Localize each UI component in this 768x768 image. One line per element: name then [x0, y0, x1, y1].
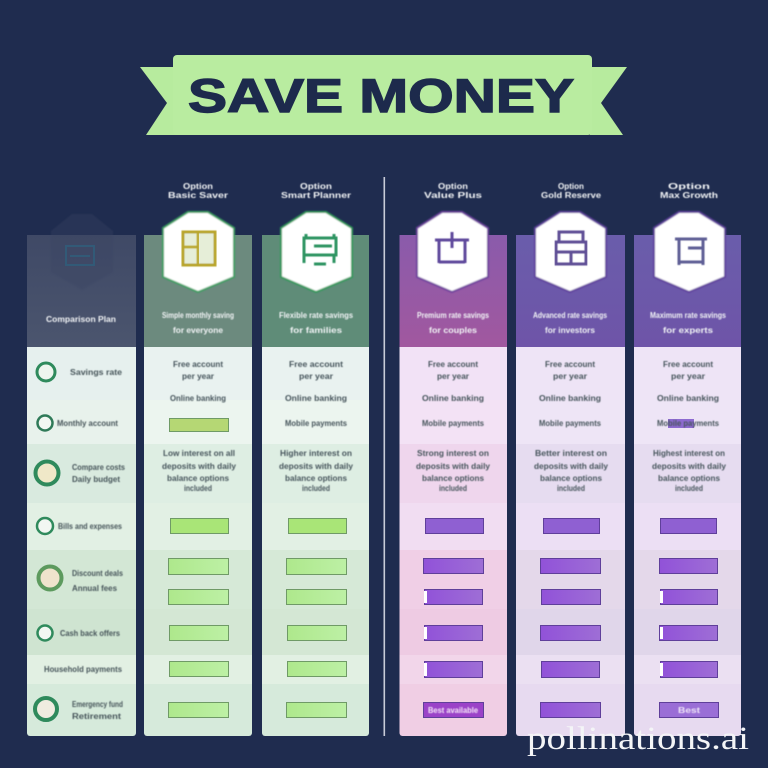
cell text: Free account [545, 360, 595, 369]
cell text: Free account [428, 360, 478, 369]
title banner [140, 55, 627, 135]
bar label: Best [678, 706, 700, 715]
cell text: Higher interest on [280, 449, 352, 458]
column title [281, 182, 351, 200]
row label 4: Bills and expenses [58, 522, 122, 531]
cell text: per year [299, 372, 333, 381]
cell text: Mobile payments [422, 419, 485, 428]
cell text: included [675, 484, 703, 493]
row label 3: Daily budget [72, 475, 120, 484]
header description: for couples [429, 326, 478, 335]
cell text: balance options [540, 474, 603, 483]
header description [650, 311, 726, 335]
row label 8 [35, 698, 123, 721]
cell text: deposits with daily [162, 462, 237, 471]
cell text: Better interest on [535, 449, 607, 458]
panel: purple option 1 [400, 182, 507, 736]
cell text: Online banking [539, 394, 601, 403]
row label 5 [38, 566, 123, 593]
cell text: balance options [285, 474, 348, 483]
cell text [162, 360, 237, 493]
bar highlights [424, 591, 427, 676]
cell text [652, 360, 727, 493]
header description [162, 311, 234, 335]
cell text: Free account [663, 360, 713, 369]
status bars [168, 418, 228, 718]
cell text: included [439, 484, 467, 493]
column title [424, 182, 483, 200]
row label 1 [37, 363, 123, 381]
header description: Maximum rate savings [650, 311, 726, 320]
cell text [416, 360, 491, 493]
row label 7: Household payments [44, 665, 123, 674]
cell text: balance options [658, 474, 721, 483]
cell text: per year [553, 372, 587, 381]
column title [168, 182, 228, 200]
header description: Flexible rate savings [279, 311, 354, 320]
cell text: Strong interest on [417, 449, 489, 458]
panel: green option 2 [262, 182, 369, 736]
cell text: per year [437, 372, 469, 381]
column title [660, 182, 718, 200]
header description [279, 311, 354, 335]
hexagon icon: window [163, 212, 234, 292]
title text: SAVE MONEY [188, 69, 574, 122]
hexagon icon: table [654, 212, 725, 292]
column title [541, 182, 602, 200]
watermark: pollinations.ai [527, 721, 749, 757]
cell text: deposits with daily [534, 462, 609, 471]
row label 1: Savings rate [70, 368, 123, 377]
row label 3 [36, 462, 126, 484]
column title: Max Growth [660, 191, 718, 200]
status bars [286, 518, 346, 718]
column title: Option [300, 182, 332, 191]
column title: Option [438, 182, 468, 191]
cell text: Mobile payments [285, 419, 348, 428]
row label 6 [38, 626, 121, 640]
cell text: Online banking [657, 394, 719, 403]
hexagon icon: desk [281, 212, 352, 292]
cell text [279, 360, 354, 493]
column title: Value Plus [424, 191, 483, 200]
header description: for investors [545, 326, 596, 335]
header description [533, 311, 607, 335]
header description: Advanced rate savings [533, 311, 607, 320]
cell text: Online banking [422, 394, 484, 403]
row label 5: Discount deals [72, 569, 123, 578]
bar label: Best available [428, 706, 479, 715]
cell text: deposits with daily [279, 462, 354, 471]
status bars [424, 518, 484, 718]
hexagon icon: table [417, 212, 488, 292]
column title: Option [558, 182, 584, 191]
row label 5: Annual fees [72, 584, 118, 593]
cell text: Free account [173, 360, 223, 369]
row label 2 [38, 416, 118, 430]
row label 2: Monthly account [57, 419, 118, 428]
panel: row labels column [27, 214, 136, 736]
cell text: Low interest on all [163, 449, 235, 458]
cell text: Free account [289, 360, 343, 369]
panel: green option 1 [144, 182, 252, 736]
column title: Smart Planner [281, 191, 351, 200]
center divider [384, 177, 385, 736]
cell text: per year [671, 372, 705, 381]
cell text: per year [182, 372, 214, 381]
header description: Premium rate savings [417, 311, 489, 320]
panel: purple option 2 [516, 182, 625, 736]
column title: Option [668, 182, 710, 191]
panel: purple option 3 [634, 182, 741, 736]
cell text [534, 360, 609, 493]
bar highlights [660, 591, 663, 676]
column title: Gold Reserve [541, 191, 602, 200]
status bars [660, 518, 718, 718]
column title: Option [183, 182, 213, 191]
cell text: included [184, 484, 212, 493]
hexagon icon: desk [535, 212, 606, 292]
column title: Basic Saver [168, 191, 228, 200]
cell text: Mobile payments [657, 419, 720, 428]
faded icon badge [51, 214, 113, 290]
cell text: deposits with daily [652, 462, 727, 471]
cell text: balance options [422, 474, 485, 483]
cell text: included [557, 484, 585, 493]
cell text: Mobile payments [539, 419, 602, 428]
cell text: Highest interest on [653, 449, 725, 458]
header description: Simple monthly saving [162, 311, 234, 320]
cell text: included [302, 484, 330, 493]
row label 4 [37, 518, 122, 534]
header description [417, 311, 489, 335]
header description: for families [290, 326, 343, 335]
row label 6: Cash back offers [60, 629, 121, 638]
status bars [540, 518, 600, 718]
cell text: Online banking [170, 394, 226, 403]
cell text: deposits with daily [416, 462, 491, 471]
row label 8: Emergency fund [72, 700, 123, 709]
row label 3: Compare costs [72, 463, 126, 472]
column header label: Comparison Plan [46, 315, 116, 324]
row label 8: Retirement [72, 712, 121, 721]
header description: for experts [663, 326, 714, 335]
cell text: Online banking [285, 394, 347, 403]
cell text: balance options [167, 474, 230, 483]
header description: for everyone [173, 326, 224, 335]
